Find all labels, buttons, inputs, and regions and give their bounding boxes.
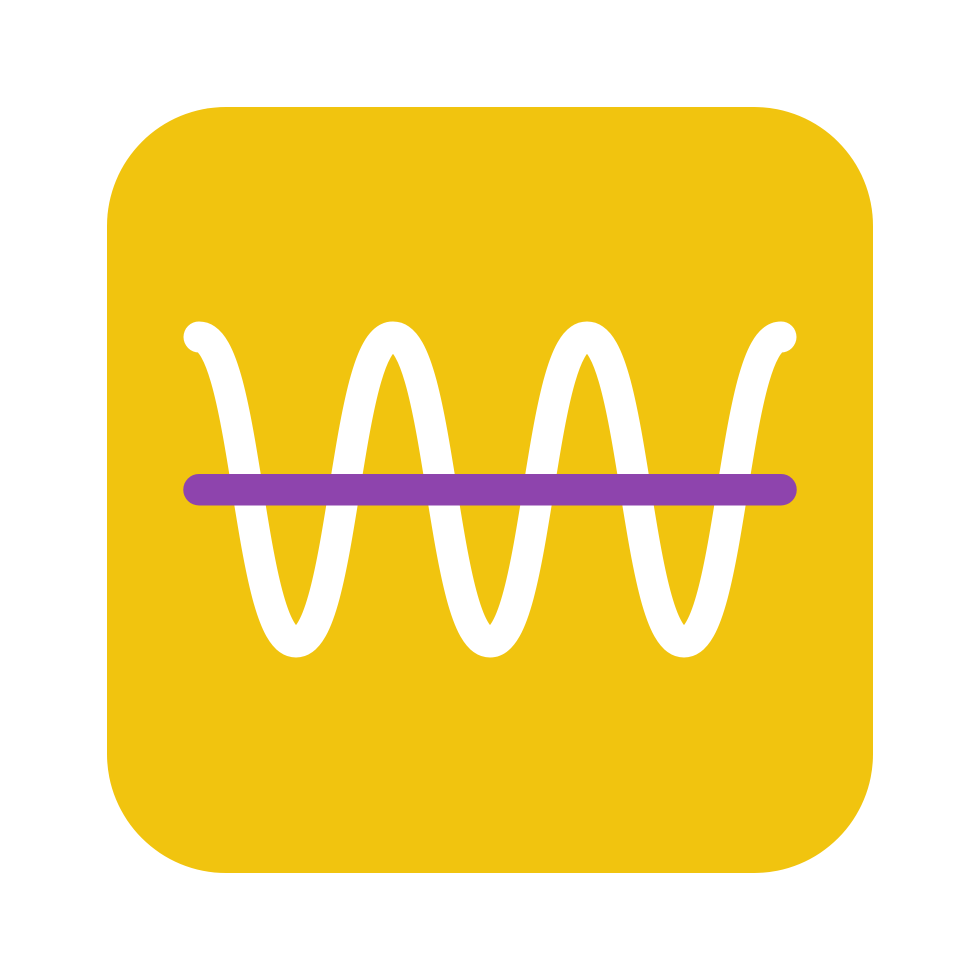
- purple horizontal axis line: [199, 474, 781, 505]
- yellow rounded square background: [107, 107, 873, 873]
- white sine wave: [199, 337, 781, 642]
